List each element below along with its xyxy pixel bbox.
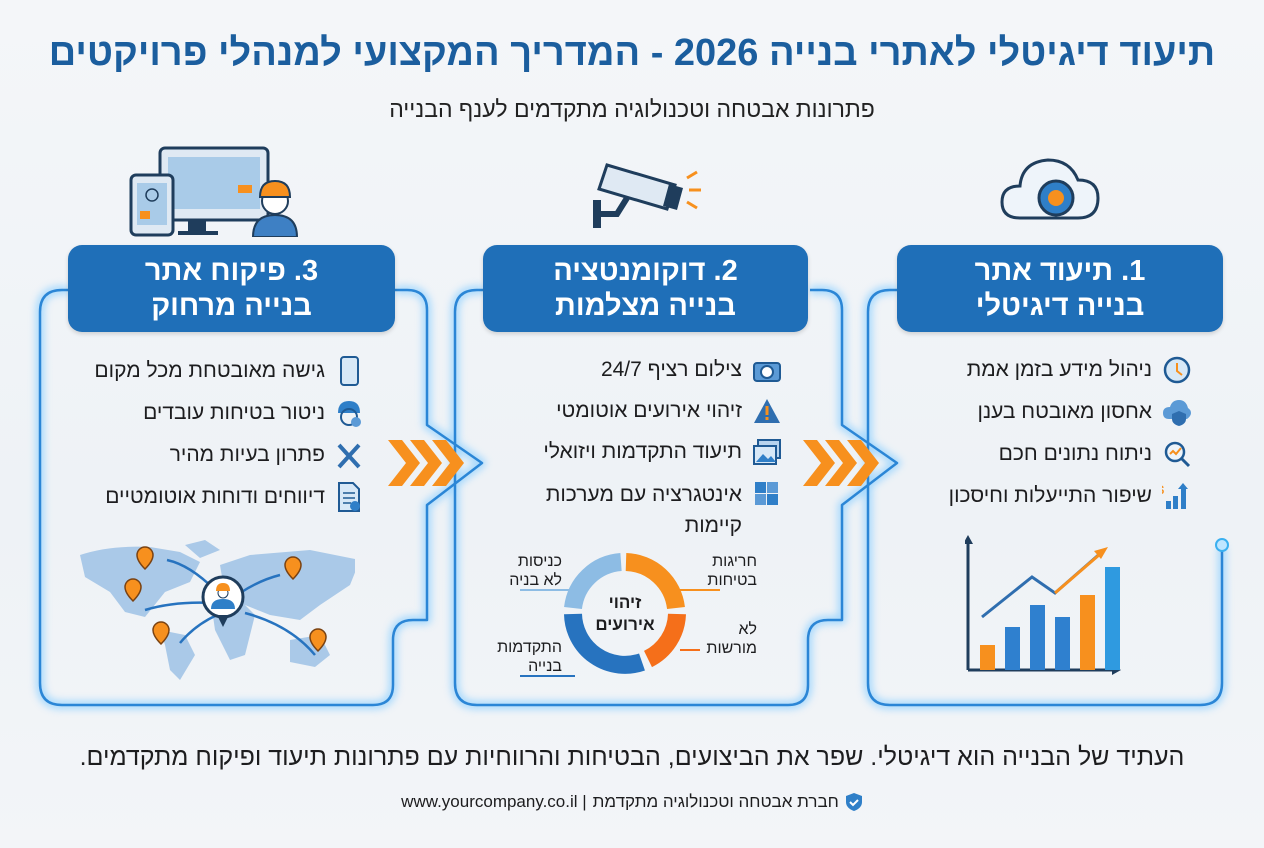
arrow: chevrons 3 to 2 bbox=[388, 440, 464, 486]
item: reports: דיווחים ודוחות אוטומטיים bbox=[105, 485, 325, 508]
list: panel 2 bbox=[543, 358, 781, 537]
item: efficiency: שיפור התייעלות וחיסכון bbox=[949, 484, 1152, 507]
title: תיעוד דיגיטלי לאתרי בנייה 2026 - המדריך המקצועי למנהלי פרויקטים bbox=[49, 32, 1215, 74]
header: panel 3 bbox=[68, 245, 395, 332]
header: panel 2 bbox=[483, 245, 808, 332]
donut label: progress: בנייה bbox=[528, 658, 562, 675]
donut label: unauthorized: מורשות bbox=[706, 640, 757, 657]
donut label: safety bbox=[707, 553, 757, 589]
item: reports bbox=[105, 482, 360, 512]
header: panel 3: 3. פיקוח אתר bbox=[145, 255, 318, 287]
list: panel 1 bbox=[949, 356, 1191, 509]
donut label: progress bbox=[497, 639, 562, 675]
item: secure access: גישה מאובטחת מכל מקום bbox=[94, 359, 325, 382]
item: integration: אינטגרציה עם מערכות bbox=[546, 483, 742, 506]
donut label: unauthorized bbox=[706, 621, 757, 657]
donut label: safety: חריגות bbox=[712, 553, 757, 570]
closing statement: העתיד של הבנייה הוא דיגיטלי. שפר את הביצועים, הבטיחות והרווחיות עם פתרונות תיעוד ופיקוח מתקדמים. bbox=[80, 743, 1184, 771]
item: visual: תיעוד התקדמות ויזואלי bbox=[543, 440, 742, 463]
footer: www.yourcompany.co.il | bbox=[401, 792, 587, 811]
donut label: entries: לא בניה bbox=[509, 572, 562, 589]
icon: monitors and worker bbox=[130, 146, 298, 237]
header: panel 3: בנייה מרחוק bbox=[151, 290, 312, 322]
header: panel 1: 1. תיעוד אתר bbox=[975, 255, 1145, 287]
header: panel 1 bbox=[897, 245, 1223, 332]
chart: donut event detection: אירועים bbox=[595, 615, 655, 634]
donut label: progress: התקדמות bbox=[497, 639, 562, 656]
item: tools: פתרון בעיות מהיר bbox=[170, 443, 325, 466]
donut label: entries bbox=[509, 553, 562, 589]
item: secure access bbox=[94, 356, 359, 386]
item: integration bbox=[546, 482, 778, 537]
chart: donut event detection bbox=[497, 553, 757, 677]
header: panel 2: 2. דוקומנטציה bbox=[553, 255, 738, 287]
header: panel 2: בנייה מצלמות bbox=[555, 290, 736, 322]
donut label: safety: בטיחות bbox=[707, 572, 757, 589]
item: worker safety: ניטור בטיחות עובדים bbox=[143, 401, 325, 424]
item: analytics: ניתוח נתונים חכם bbox=[999, 442, 1152, 465]
list: panel 3 bbox=[94, 356, 361, 512]
header: panel 1: בנייה דיגיטלי bbox=[976, 290, 1144, 322]
footer: חברת אבטחה וטכנולוגיה מתקדמת bbox=[593, 792, 839, 811]
icon: cloud gear bbox=[1000, 158, 1100, 220]
footer bbox=[401, 792, 862, 811]
item: cloud: אחסון מאובטח בענן bbox=[977, 400, 1152, 423]
donut label: entries: כניסות bbox=[518, 553, 562, 570]
icon: security camera bbox=[593, 163, 701, 228]
chart: bar chart with trend bbox=[965, 535, 1121, 675]
item: auto events: זיהוי אירועים אוטומטי bbox=[556, 399, 742, 422]
donut label: unauthorized: לא bbox=[738, 621, 757, 638]
arrow: chevrons 2 to 1 bbox=[803, 440, 879, 486]
item: real-time: ניהול מידע בזמן אמת bbox=[967, 358, 1152, 381]
item: integration: קיימות bbox=[685, 514, 742, 537]
item: 24/7: צילום רציף 24/7 bbox=[601, 358, 742, 381]
map: remote supervision bbox=[80, 540, 355, 680]
subtitle: פתרונות אבטחה וטכנולוגיה מתקדמים לענף הבנייה bbox=[389, 96, 875, 122]
chart: donut event detection: זיהוי bbox=[609, 593, 641, 612]
